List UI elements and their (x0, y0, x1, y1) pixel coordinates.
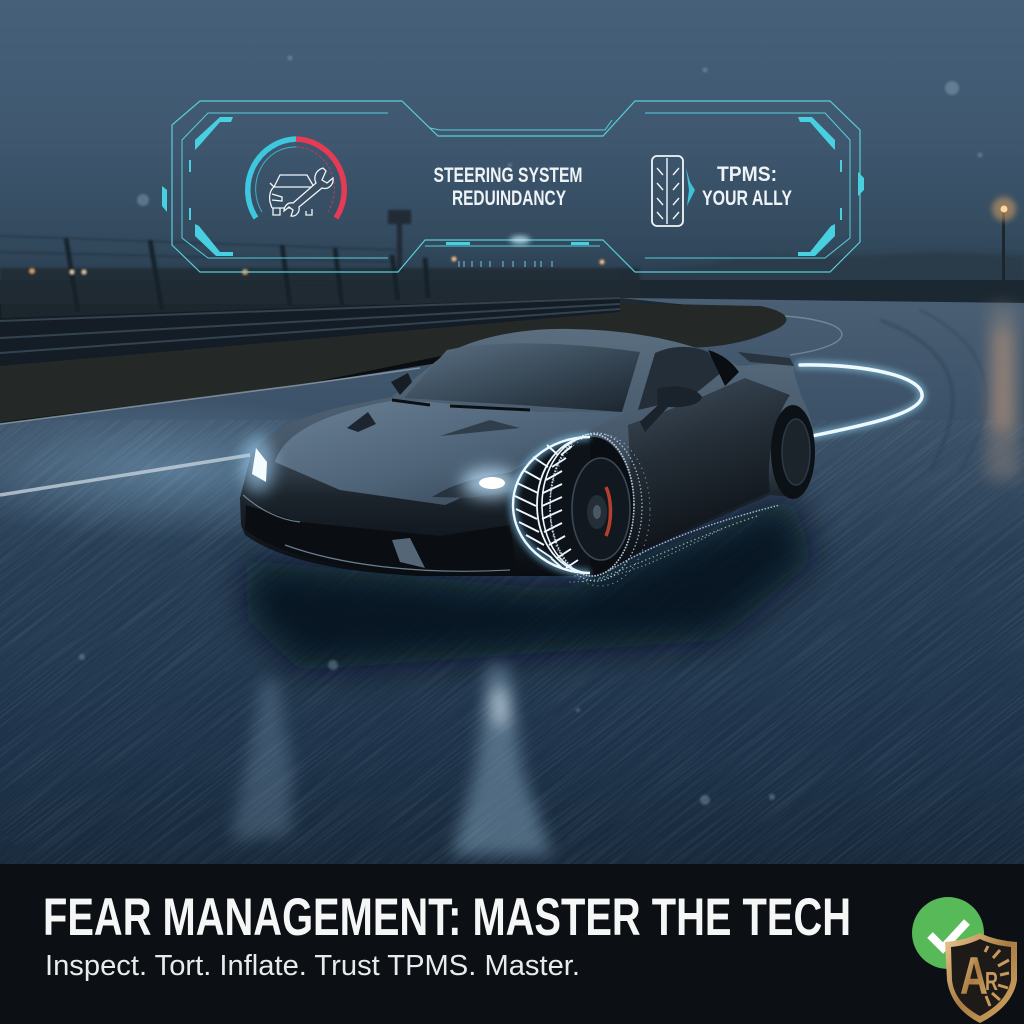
pale wet patch on road (0, 400, 430, 540)
hood panel (275, 400, 628, 505)
HUD corner accents (162, 117, 864, 256)
diagonal rain streak texture on road (0, 420, 1024, 864)
headlight right (432, 468, 518, 498)
windshield (404, 343, 640, 412)
hood crease (440, 420, 520, 436)
warm lamp reflection on track (985, 306, 1020, 480)
rear wheel (771, 405, 815, 499)
background: stormy sky (0, 0, 1024, 300)
trackside fence (0, 236, 640, 332)
HUD panel (162, 101, 864, 272)
car shadow on wet road (245, 495, 815, 670)
rear quarter window (708, 350, 739, 386)
far dark track barrier (0, 280, 1024, 304)
spoiler (738, 352, 794, 366)
track edge lines (0, 310, 986, 495)
label: TPMS your ally: TPMS: (717, 163, 777, 186)
logo: gold shield: R (985, 966, 998, 996)
front wheel (513, 437, 633, 573)
icon: tire tread (652, 156, 683, 226)
logo: gold shield: A (960, 947, 988, 1006)
label: TPMS your ally: YOUR ALLY (702, 187, 792, 210)
label: steering system redundancy (434, 164, 582, 210)
car body (240, 329, 814, 576)
raindrops (79, 56, 982, 805)
guardrail (0, 297, 620, 366)
label: TPMS your ally (702, 163, 792, 210)
subtitle: Inspect. Tort. Inflate. Trust TPMS. Master. (45, 950, 580, 982)
wrench (284, 168, 333, 216)
HUD centre light (510, 236, 530, 244)
bumper trim (243, 495, 510, 571)
label: steering system redundancy: STEERING SYSTEM (434, 164, 582, 187)
grass verge (0, 303, 786, 422)
icon: pressure arrow (686, 168, 695, 206)
HUD micro ticker (459, 261, 552, 267)
lower bumper intake (245, 505, 518, 572)
door panel (628, 378, 790, 548)
track surface (0, 298, 1024, 870)
car outline (270, 175, 314, 215)
wipers (392, 400, 530, 410)
water spray (550, 433, 780, 586)
wing mirror right (640, 386, 702, 432)
headlight reflection left (230, 680, 292, 840)
headlight reflection right (452, 665, 552, 855)
caption band (0, 864, 1024, 1024)
glowing racing line (800, 365, 922, 436)
floodlight tower (388, 210, 411, 272)
sports car (170, 329, 815, 586)
label: steering system redundancy: REDUINDANCY (452, 187, 566, 210)
icon: green check badge (912, 897, 984, 969)
HUD outer frame (172, 101, 860, 272)
street lamp with glow (992, 197, 1016, 280)
icon: gauge with car and wrench (248, 139, 344, 218)
glowing tire tread (513, 437, 590, 573)
distant tree line (620, 252, 1024, 300)
hood vent (347, 412, 376, 432)
logo: gold shield (945, 933, 1017, 1023)
mirror left (391, 373, 412, 395)
bumper fog trim (392, 538, 425, 568)
HUD inner frame (182, 113, 850, 258)
side window (638, 347, 722, 410)
headlight left (170, 437, 340, 493)
